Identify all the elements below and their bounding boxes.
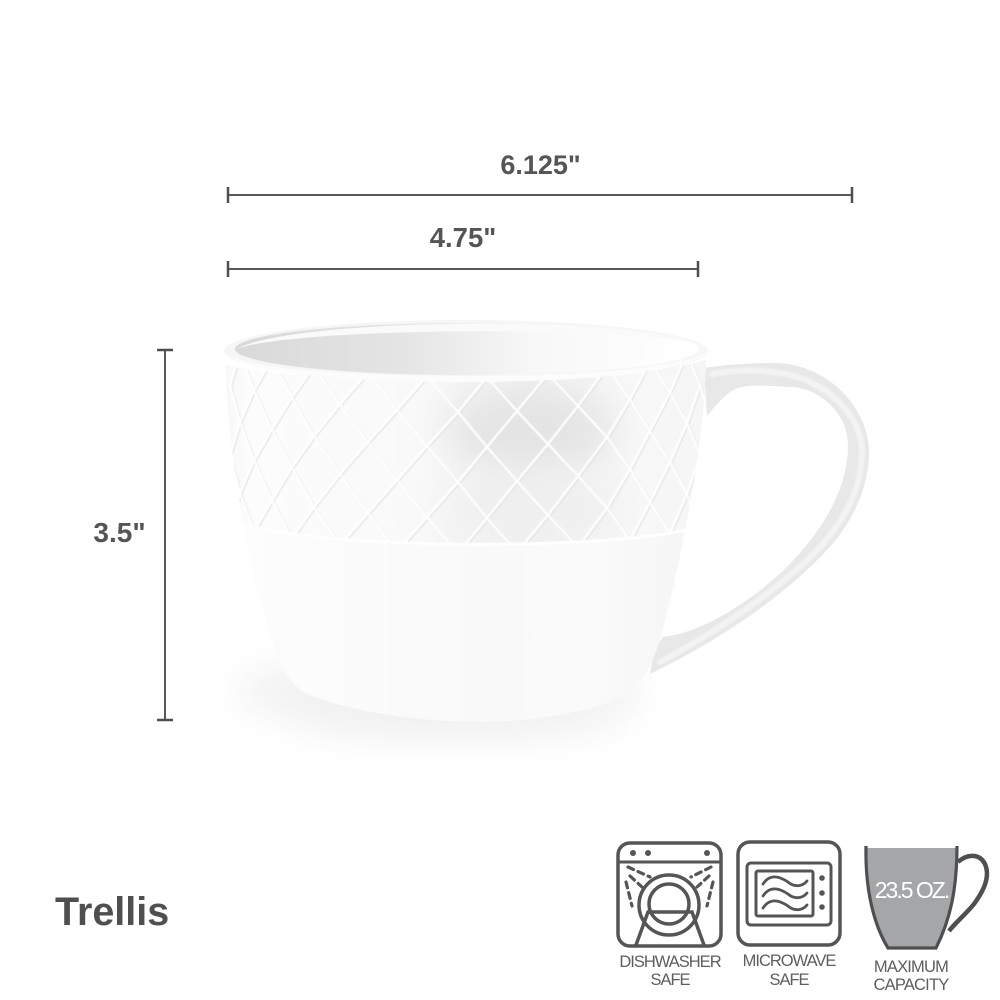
- band lower edge: [243, 524, 685, 544]
- label: dishwasher safe: SAFE: [650, 971, 691, 989]
- icon: microwave safe: [738, 842, 840, 945]
- mug body: [243, 520, 686, 722]
- label: microwave safe: MICROWAVE: [743, 952, 836, 970]
- mug photo: white trellis mug: [220, 315, 869, 732]
- icon: maximum capacity mug: [866, 846, 987, 948]
- label: dishwasher safe: DISHWASHER: [619, 953, 722, 971]
- trellis ridges shadow: [232, 364, 704, 542]
- embossed trellis band: [232, 360, 706, 543]
- mug handle: [650, 363, 869, 674]
- dimension: overall width 6.125 inches: 6.125": [500, 150, 581, 180]
- label: maximum capacity: CAPACITY: [874, 976, 949, 994]
- icon: dishwasher safe: [618, 843, 721, 946]
- mug cast shadow: [235, 656, 645, 732]
- label: microwave safe: SAFE: [769, 971, 810, 989]
- dimension: height 3.5 inches: 3.5": [93, 517, 146, 548]
- title: Trellis: Trellis: [55, 890, 169, 934]
- trellis ridges highlight: [230, 364, 704, 542]
- mug interior and rim: [224, 320, 708, 382]
- dimension: rim diameter 4.75 inches: 4.75": [430, 222, 496, 253]
- rim front lip: [225, 350, 708, 382]
- capacity value: 23.5 OZ.: [875, 877, 949, 903]
- label: maximum capacity: MAXIMUM: [874, 958, 948, 976]
